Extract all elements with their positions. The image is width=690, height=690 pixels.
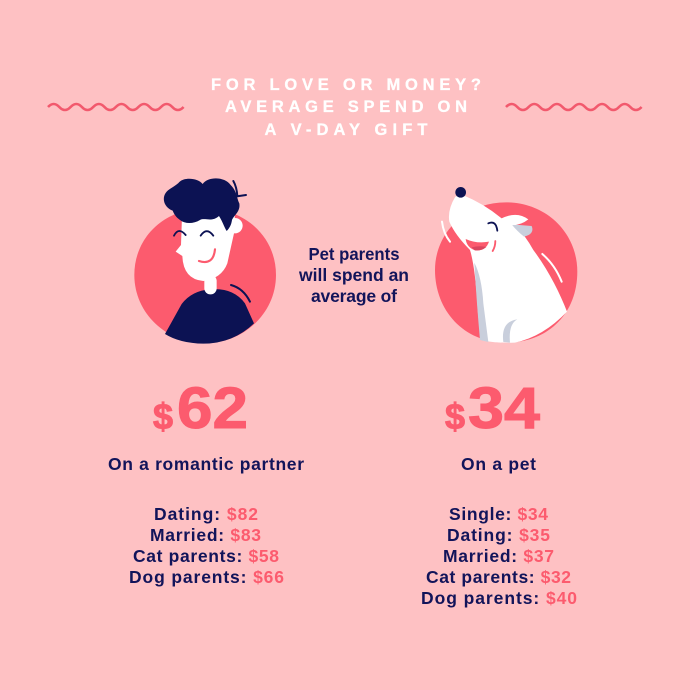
left breakdown list: Married: $83 [150, 525, 261, 545]
stat: $34: $ [445, 396, 465, 437]
icon: smiling man [134, 178, 276, 344]
label: on a romantic partner: On a romantic partner [108, 454, 304, 474]
left breakdown list: Cat parents: $58 [133, 546, 279, 566]
icon: happy dog [435, 187, 577, 343]
comparison caption [298, 244, 409, 306]
title: A V-DAY GIFT [264, 121, 428, 139]
stat: $34 [445, 376, 540, 441]
stat: $62 [153, 376, 248, 441]
title: AVERAGE SPEND ON [225, 98, 467, 116]
label: on a pet: On a pet [461, 454, 536, 474]
stat: $62: $ [153, 396, 173, 437]
right breakdown list: Dog parents: $40 [421, 588, 577, 608]
right breakdown list: Married: $37 [443, 546, 554, 566]
comparison caption: will spend an [298, 265, 409, 285]
left breakdown list: Dating: $82 [154, 504, 258, 524]
left breakdown list: Dog parents: $66 [129, 567, 284, 587]
title: FOR LOVE OR MONEY? [211, 76, 481, 94]
stat: $34: 34 [468, 376, 540, 441]
comparison caption: average of [311, 286, 397, 306]
left wavy line [48, 104, 184, 110]
right breakdown list: Cat parents: $32 [426, 567, 571, 587]
right breakdown list: Single: $34 [449, 504, 548, 524]
comparison caption: Pet parents [308, 244, 400, 264]
title [211, 76, 481, 139]
right breakdown list [421, 504, 577, 608]
stat: $62: 62 [177, 376, 248, 441]
right wavy line [506, 104, 642, 110]
left breakdown list [129, 504, 284, 587]
right breakdown list: Dating: $35 [447, 525, 550, 545]
